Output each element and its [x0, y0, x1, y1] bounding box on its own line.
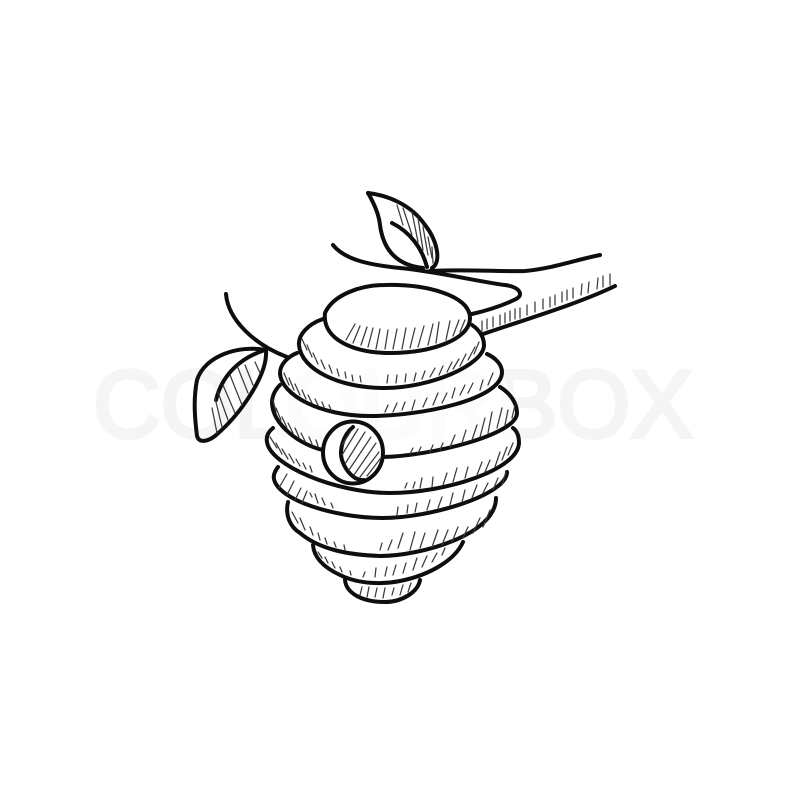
icon: top leaf: [368, 193, 437, 268]
hive entrance hole: [323, 422, 383, 484]
tier 4: [272, 385, 517, 457]
watermark: COLOURBOX: [93, 351, 693, 458]
beehive tiers: [267, 285, 519, 602]
tier 2: [299, 319, 484, 388]
icon: left leaf with stem: [195, 294, 287, 441]
tier 3: [280, 353, 502, 416]
tier 8: [313, 542, 463, 583]
tier 6: [274, 467, 507, 518]
tier 7: [287, 498, 496, 556]
tier 9: bottom: [345, 580, 420, 602]
hive backdrop veiling the watermark: [267, 285, 519, 602]
tier 1: top cap: [325, 285, 470, 353]
tier 5: [267, 428, 519, 493]
branch: [333, 245, 615, 334]
